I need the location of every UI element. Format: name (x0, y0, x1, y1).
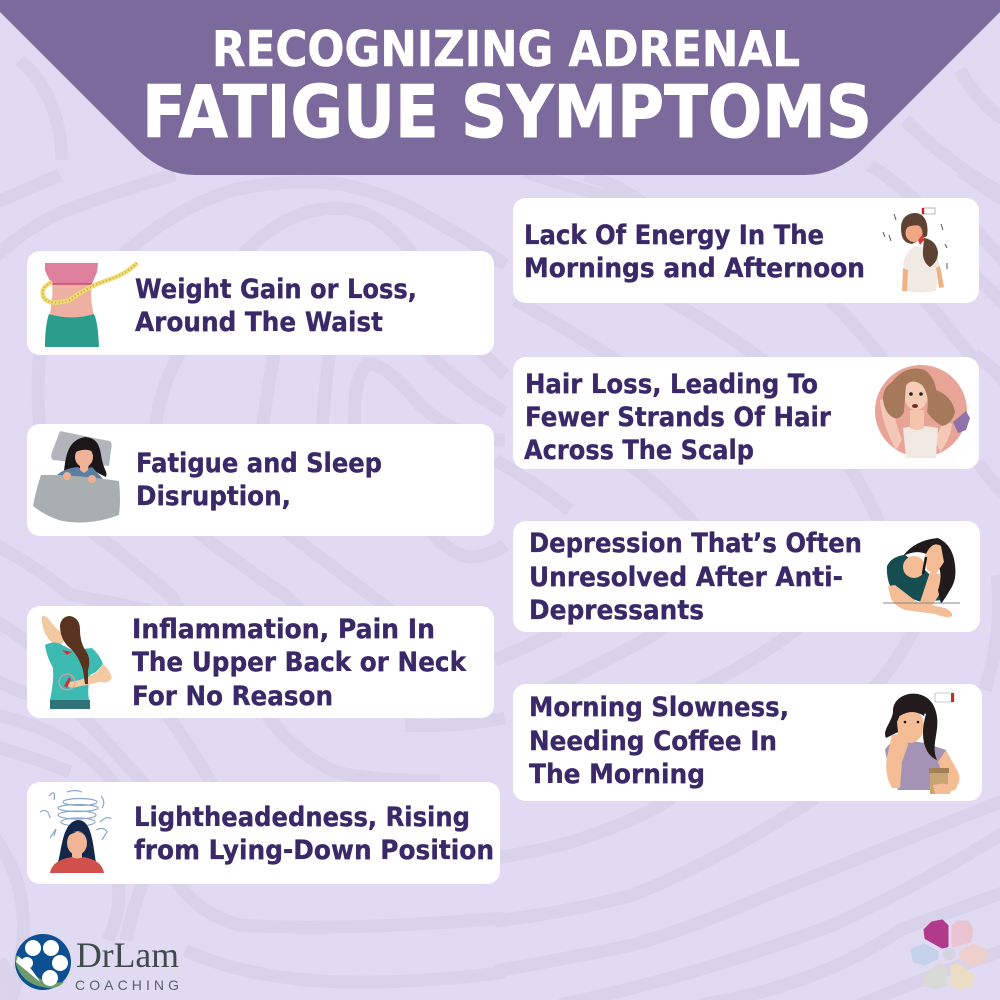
logo: DrLam Coaching: COACHING (75, 977, 179, 993)
panel: lack of energy (513, 198, 979, 303)
icon: woman with head in hand (883, 538, 960, 617)
panel: depression (513, 521, 980, 632)
icon: logo flower (15, 934, 71, 990)
text: morning slowness: Needing Coffee In (529, 726, 777, 757)
text: depression: Depressants (529, 595, 704, 626)
panel: lightheadedness (27, 782, 500, 884)
logo: DrLam Coaching: DrLam (76, 935, 179, 975)
icon: woman with hair loss (875, 365, 970, 458)
text: lack of energy: Mornings and Afternoon (524, 253, 865, 284)
title: FATIGUE SYMPTOMS (142, 70, 872, 154)
text: inflammation: Inflammation, Pain In (132, 614, 435, 645)
title: RECOGNIZING ADRENAL (212, 21, 800, 78)
panel: morning slowness (513, 684, 982, 801)
text: fatigue and sleep disruption: Fatigue and Sleep (136, 448, 382, 479)
text: lightheadedness: Lightheadedness, Rising (134, 802, 470, 833)
text: inflammation: For No Reason (132, 681, 333, 712)
text: hair loss: Fewer Strands Of Hair (525, 402, 832, 433)
text: lightheadedness: from Lying-Down Position (134, 835, 494, 866)
icon: tired woman with low battery (883, 208, 947, 292)
text: morning slowness: The Morning (529, 759, 705, 790)
panel: weight gain or loss (27, 251, 494, 355)
panel: hair loss (513, 357, 979, 469)
panel: fatigue and sleep disruption (27, 424, 494, 536)
icon: woman lying in bed (33, 431, 120, 523)
logo: petal flower (912, 921, 986, 988)
text: depression: Unresolved After Anti- (529, 562, 843, 593)
icon: tired woman with coffee (885, 693, 959, 794)
text: inflammation: The Upper Back or Neck (132, 647, 467, 678)
icon: waist with measuring tape (43, 263, 137, 347)
text: morning slowness: Morning Slowness, (529, 692, 789, 723)
text: weight gain or loss: Around The Waist (135, 307, 383, 338)
header banner (0, 0, 1000, 175)
icon: woman holding back (42, 616, 112, 709)
text: lack of energy: Lack Of Energy In The (524, 220, 824, 251)
text: hair loss: Hair Loss, Leading To (525, 369, 818, 400)
text: weight gain or loss: Weight Gain or Loss, (135, 274, 417, 305)
text: fatigue and sleep disruption: Disruption, (136, 481, 291, 512)
icon: dizzy woman (40, 790, 111, 873)
logo: DrLam Coaching (15, 934, 179, 993)
text: depression: Depression That’s Often (529, 528, 862, 559)
title (142, 21, 872, 154)
text: hair loss: Across The Scalp (524, 435, 754, 466)
panel: inflammation (27, 606, 494, 718)
